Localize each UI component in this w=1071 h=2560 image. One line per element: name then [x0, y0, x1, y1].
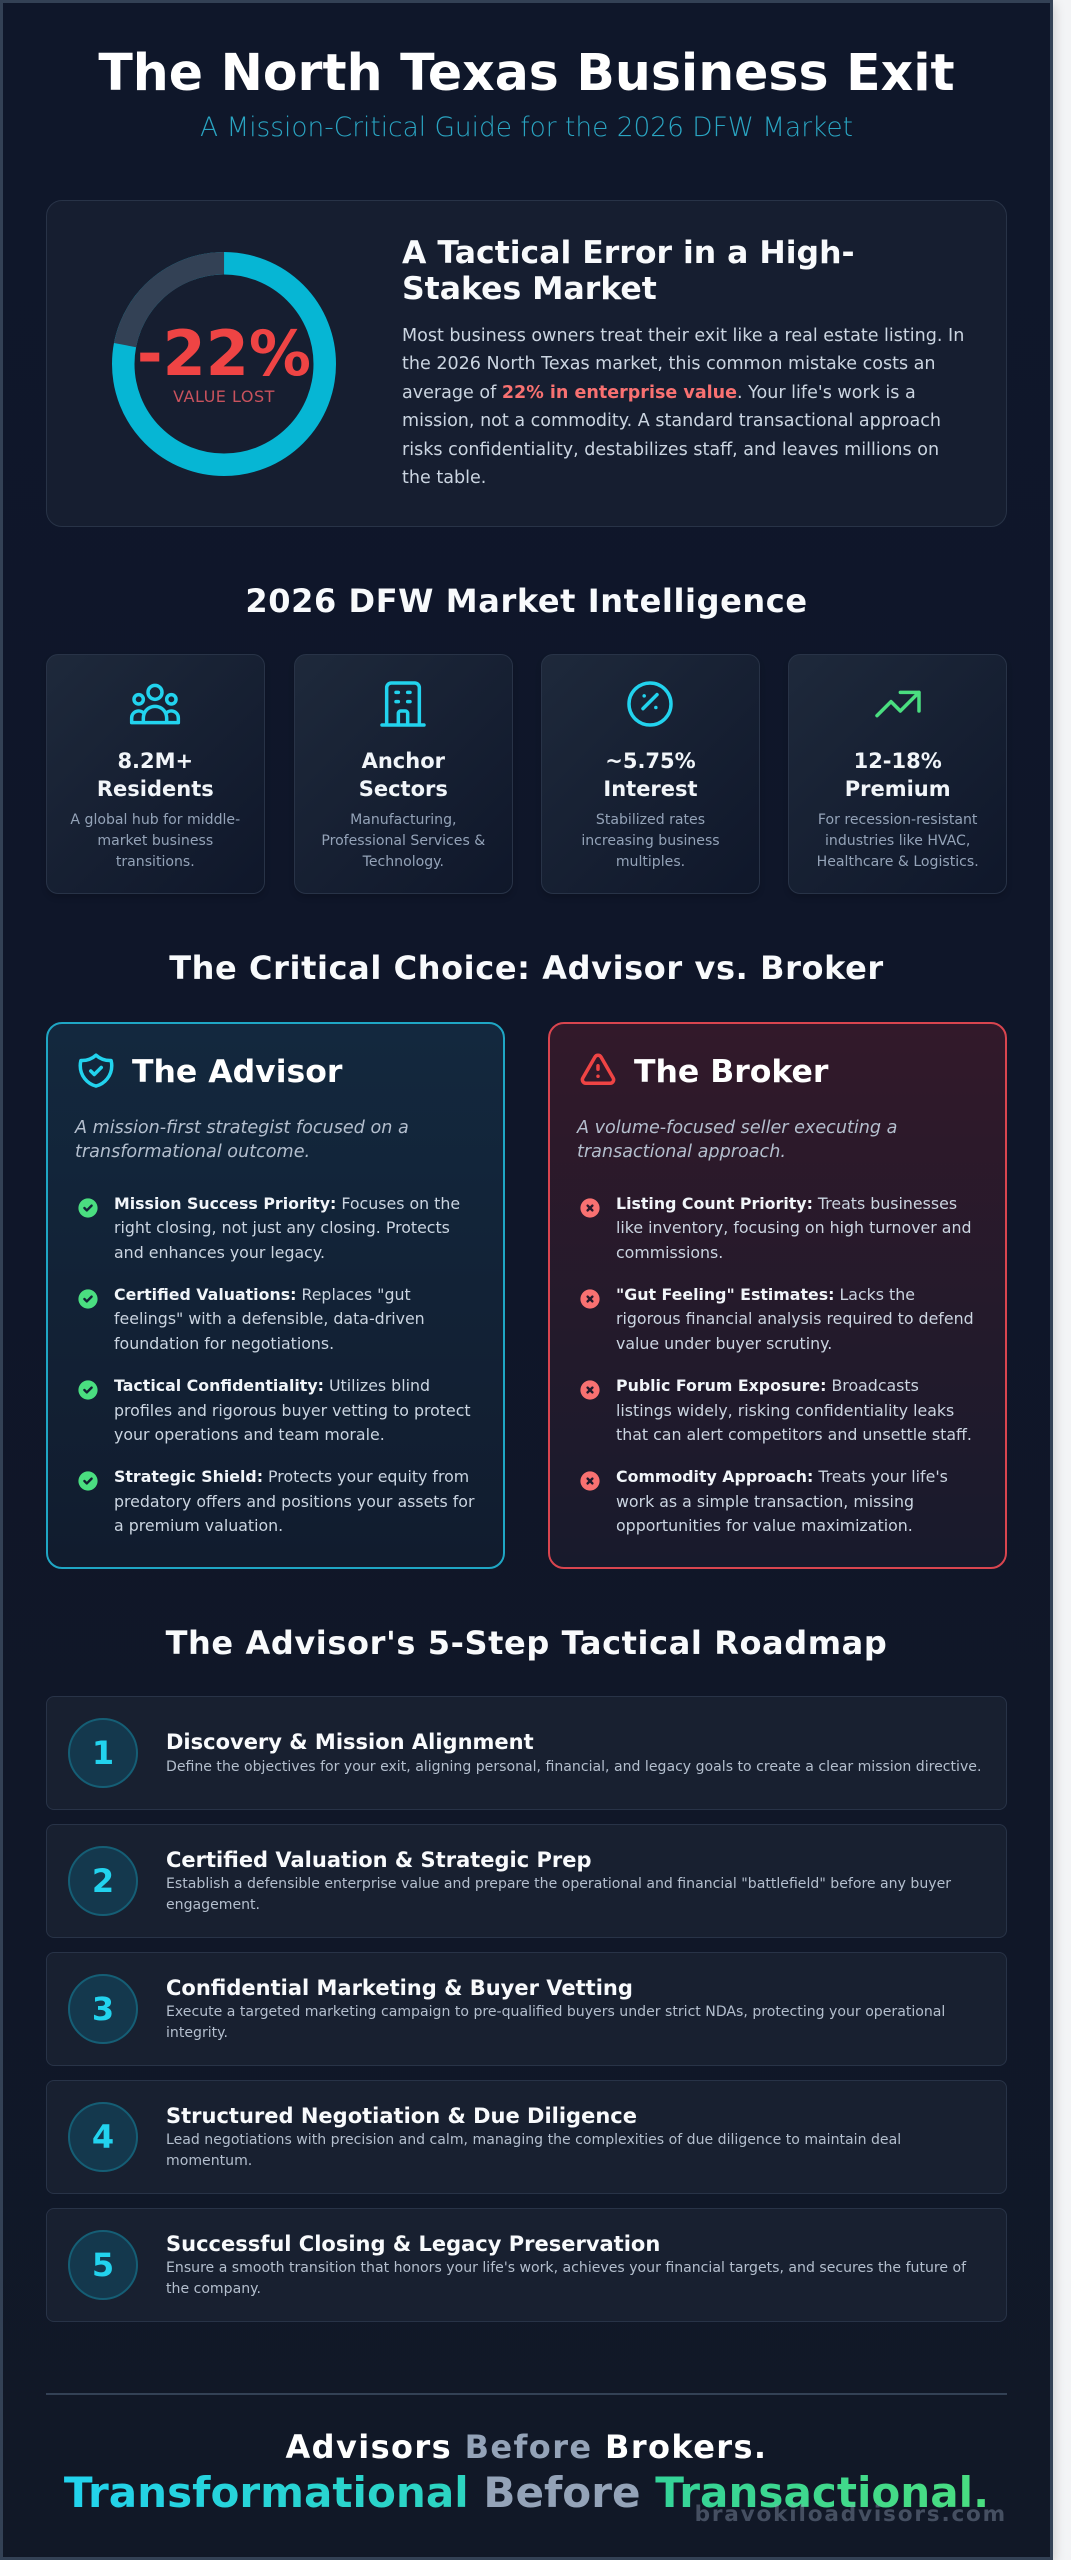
- item text: [616, 1194, 972, 1262]
- item text: that can alert competitors and unsettle staff.: [616, 1425, 972, 1444]
- stat description: multiples.: [616, 854, 685, 870]
- stat value: 12-18%: [854, 749, 942, 773]
- panel heading: The Advisor: [132, 1054, 342, 1090]
- item text: listings widely, risking confidentiality leaks: [616, 1401, 954, 1420]
- stat description: market business: [97, 833, 213, 849]
- step title: Discovery & Mission Alignment: [166, 1730, 534, 1754]
- item text: a premium valuation.: [114, 1516, 283, 1535]
- item text: rigorous financial analysis required to defend: [616, 1309, 974, 1328]
- website watermark: bravokiloadvisors.com: [695, 2502, 1007, 2526]
- icon: building: [380, 681, 426, 727]
- step description: the company.: [166, 2281, 261, 2297]
- item text: Commodity Approach: Treats your life's: [616, 1467, 948, 1486]
- hero text: the 2026 North Texas market, this common mistake costs an: [402, 354, 936, 374]
- footer divider: [46, 2393, 1007, 2395]
- step number: 3: [92, 1990, 114, 2028]
- icon: shield check: [78, 1053, 114, 1088]
- step number: 4: [92, 2118, 114, 2156]
- panel intro: transformational outcome.: [75, 1142, 310, 1162]
- step number: [68, 2230, 138, 2300]
- stat description: increasing business: [581, 833, 720, 849]
- stat value: [845, 749, 951, 801]
- list item: [580, 1376, 972, 1444]
- step description: Execute a targeted marketing campaign to pre-qualified buyers under strict NDAs, protecting your operational: [166, 2004, 945, 2020]
- step description: Define the objectives for your exit, aligning personal, financial, and legacy goals to create a clear mission directive.: [166, 1759, 981, 1775]
- stat value: [97, 749, 214, 801]
- stat value: Interest: [603, 777, 698, 801]
- stat description: A global hub for middle-: [70, 812, 240, 828]
- icon: check: [78, 1380, 98, 1400]
- hero heading: [402, 235, 855, 307]
- donut caption: VALUE LOST: [173, 386, 275, 406]
- icon: cross: [578, 1469, 602, 1493]
- list item: [78, 1194, 460, 1262]
- item text: [616, 1285, 974, 1353]
- subtitle: A Mission-Critical Guide for the 2026 DFW Market: [200, 112, 853, 143]
- stat value: [359, 749, 448, 801]
- stat value: Residents: [97, 777, 214, 801]
- item text: foundation for negotiations.: [114, 1334, 334, 1353]
- item text: like inventory, focusing on high turnover and: [616, 1218, 972, 1237]
- stat value: Anchor: [362, 749, 445, 773]
- hero text: Most business owners treat their exit like a real estate listing. In: [402, 326, 964, 346]
- panel: step 2: [46, 1824, 1007, 1938]
- stat description: [581, 812, 720, 870]
- list item: [78, 1376, 471, 1444]
- panel: step 4: [46, 2080, 1007, 2194]
- hero text: [402, 326, 964, 488]
- step description: Ensure a smooth transition that honors your life's work, achieves your financial targets, and secures the future of: [166, 2260, 966, 2276]
- list item: [580, 1285, 974, 1353]
- item text: commissions.: [616, 1242, 723, 1262]
- stat description: [817, 812, 979, 870]
- step description: [166, 1874, 951, 1916]
- item text: right closing, not just any closing. Protects: [114, 1218, 450, 1237]
- icon: percent: [627, 681, 673, 727]
- heading: critical choice: The Critical Choice: Advisor vs. Broker: [169, 949, 884, 987]
- panel: tactical error hero: [46, 200, 1007, 527]
- item text: work as a simple transaction, missing: [616, 1492, 914, 1511]
- stat description: Healthcare & Logistics.: [817, 854, 979, 870]
- panel: stat interest: [541, 654, 760, 894]
- item text: your operations and team morale.: [114, 1425, 385, 1444]
- icon: warning triangle: [580, 1054, 616, 1085]
- step description: Establish a defensible enterprise value and prepare the operational and financial "battlefield" before any buyer: [166, 1876, 951, 1892]
- panel: stat residents: [46, 654, 265, 894]
- icon: trending up: [875, 690, 921, 718]
- panel intro: A volume-focused seller executing a: [577, 1118, 897, 1138]
- item text: and enhances your legacy.: [114, 1242, 325, 1262]
- list item: [78, 1467, 474, 1535]
- item text: "Gut Feeling" Estimates: Lacks the: [616, 1285, 915, 1304]
- panel intro: transactional approach.: [577, 1142, 786, 1162]
- panel intro: [576, 1118, 897, 1162]
- item text: Strategic Shield: Protects your equity from: [114, 1467, 469, 1486]
- panel intro: A mission-first strategist focused on a: [75, 1118, 409, 1138]
- closing line one: Advisors Before Brokers.: [285, 2428, 768, 2466]
- item text: [114, 1467, 474, 1535]
- list item: [78, 1285, 425, 1353]
- step number: [68, 2102, 138, 2172]
- step number: 1: [92, 1734, 114, 1772]
- hero text: average of 22% in enterprise value. Your life's work is a: [402, 383, 916, 403]
- step description: [166, 2130, 901, 2172]
- hero text: mission, not a commodity. A standard transactional approach: [402, 411, 941, 431]
- hero text: the table.: [402, 468, 486, 488]
- item text: Tactical Confidentiality: Utilizes blind: [114, 1376, 430, 1395]
- step number: [68, 1718, 138, 1788]
- item text: Mission Success Priority: Focuses on the: [114, 1194, 460, 1212]
- stat value: 8.2M+: [117, 749, 193, 773]
- item text: profiles and rigorous buyer vetting to protect: [114, 1401, 471, 1420]
- list item: [578, 1465, 988, 1539]
- stat description: industries like HVAC,: [825, 833, 970, 849]
- stat value: ~5.75%: [605, 749, 696, 773]
- step description: [166, 2002, 945, 2044]
- item text: Certified Valuations: Replaces "gut: [114, 1285, 411, 1304]
- step title: Structured Negotiation & Due Diligence: [166, 2104, 637, 2128]
- item text: predatory offers and positions your assets for: [114, 1492, 474, 1511]
- stat value: [603, 749, 698, 801]
- stat value: Premium: [845, 777, 951, 801]
- icon: check: [78, 1289, 98, 1309]
- step number: [68, 1974, 138, 2044]
- heading: roadmap: The Advisor's 5-Step Tactical Roadmap: [166, 1624, 887, 1662]
- stat value: Sectors: [359, 777, 448, 801]
- icon: cross: [580, 1198, 600, 1218]
- hero heading: A Tactical Error in a High-: [402, 235, 855, 271]
- item text: [616, 1376, 972, 1444]
- panel: stat premium: [788, 654, 1007, 894]
- step number: 5: [92, 2246, 114, 2284]
- step title: Certified Valuation & Strategic Prep: [166, 1848, 592, 1872]
- icon: check: [78, 1471, 98, 1491]
- item text: Listing Count Priority: Treats businesses: [616, 1194, 957, 1212]
- donut value: -22%: [137, 316, 311, 390]
- hero heading: Stakes Market: [402, 271, 657, 307]
- step title: Successful Closing & Legacy Preservation: [166, 2232, 660, 2256]
- panel: step 3: [46, 1952, 1007, 2066]
- stat description: Stabilized rates: [596, 812, 705, 828]
- stat description: Professional Services &: [321, 833, 485, 849]
- list item: [580, 1194, 972, 1262]
- item text: [114, 1285, 425, 1353]
- title: The North Texas Business Exit: [98, 42, 955, 102]
- icon: cross: [580, 1380, 600, 1400]
- step number: [68, 1846, 138, 1916]
- panel: stat sectors: [294, 654, 513, 894]
- item text: value under buyer scrutiny.: [616, 1334, 832, 1353]
- stat description: Technology.: [363, 854, 444, 870]
- closing line two: Transformational Before Transactional.: [64, 2468, 989, 2517]
- icon: check: [78, 1198, 98, 1218]
- panel intro: [74, 1118, 409, 1162]
- step description: engagement.: [166, 1897, 260, 1913]
- item text: Public Forum Exposure: Broadcasts: [616, 1376, 919, 1395]
- item text: feelings" with a defensible, data-driven: [114, 1309, 425, 1328]
- stat description: [70, 812, 240, 870]
- step number: 2: [92, 1862, 114, 1900]
- icon: people: [130, 684, 180, 724]
- panel heading: The Broker: [634, 1054, 828, 1090]
- item text: [114, 1194, 460, 1262]
- item text: opportunities for value maximization.: [616, 1516, 913, 1535]
- step title: Confidential Marketing & Buyer Vetting: [166, 1976, 633, 2000]
- step description: [166, 2258, 966, 2300]
- panel: the broker: [548, 1022, 1007, 1569]
- stat description: For recession-resistant: [818, 812, 977, 828]
- panel: step 1: [46, 1696, 1007, 1810]
- icon: cross: [580, 1289, 600, 1309]
- panel: the advisor: [46, 1022, 505, 1569]
- heading: market intelligence: 2026 DFW Market Intelligence: [245, 582, 808, 620]
- donut chart: 22 percent value lost: [112, 252, 336, 476]
- step description: momentum.: [166, 2153, 252, 2169]
- step description: Lead negotiations with precision and calm, managing the complexities of due diligence to maintain deal: [166, 2132, 901, 2148]
- step description: integrity.: [166, 2025, 228, 2041]
- stat description: transitions.: [116, 854, 195, 870]
- item text: [616, 1465, 948, 1539]
- item text: [114, 1376, 471, 1444]
- stat description: Manufacturing,: [350, 812, 456, 828]
- panel: step 5: [46, 2208, 1007, 2322]
- hero text: risks confidentiality, destabilizes staff, and leaves millions on: [402, 440, 939, 460]
- stat description: [321, 812, 485, 870]
